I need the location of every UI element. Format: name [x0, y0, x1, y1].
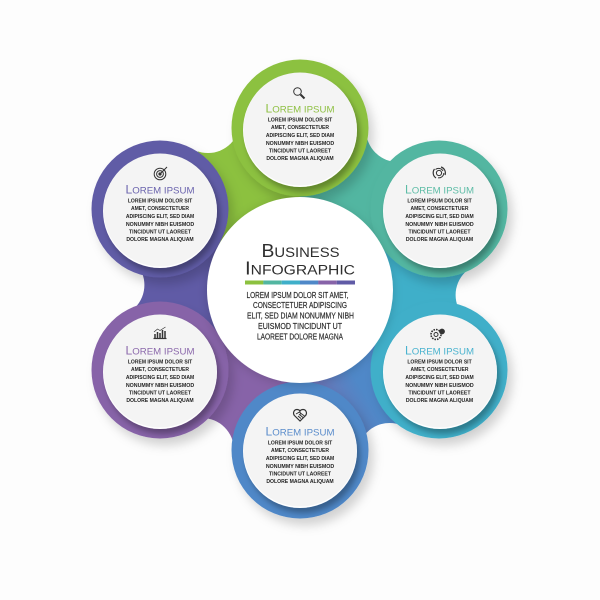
petal ring: purple [92, 302, 228, 438]
panel: green step text: ADIPISCING ELIT, SED DIAM [266, 133, 334, 139]
white discs [103, 72, 497, 508]
panel: cyan step text: NONUMMY NIBH EUISMOD [405, 383, 474, 389]
icon: gears [431, 329, 444, 340]
panel: teal step text: ADIPISCING ELIT, SED DIAM [405, 214, 474, 220]
center heading: INFOGRAPHIC [245, 258, 355, 278]
panel: blue step text: LOREM IPSUM DOLOR SIT [268, 440, 332, 446]
petal ring: cyan [370, 302, 508, 438]
panel: teal step text: DOLORE MAGNA ALIQUAM [406, 237, 473, 243]
center paragraph: CONSECTETUER ADIPISCING [253, 301, 347, 310]
panel: teal step text: AMET, CONSECTETUER [410, 206, 469, 212]
panel: blue step text: AMET, CONSECTETUER [271, 448, 330, 454]
panel: purple step text: AMET, CONSECTETUER [131, 367, 190, 373]
icon: handshake heart [294, 410, 306, 421]
panel: purple step text: DOLORE MAGNA ALIQUAM [126, 398, 194, 404]
panel: green step text: LOREM IPSUM [265, 102, 335, 116]
colour bar [245, 280, 355, 284]
notches between petals [80, 89, 520, 487]
panel: purple step text [126, 344, 194, 404]
panel: purple step text: ADIPISCING ELIT, SED DIAM [126, 375, 194, 381]
panel: teal step text: TINCIDUNT UT LAOREET [408, 229, 471, 235]
panel: green step text: TINCIDUNT UT LAOREET [269, 148, 331, 154]
petal ring: teal [370, 140, 508, 278]
icon: target [154, 167, 167, 180]
panel: cyan step text: LOREM IPSUM [405, 344, 474, 358]
connecting colour band [128, 118, 472, 462]
panel: blue step text: LOREM IPSUM [265, 425, 335, 439]
panel: purple step text: TINCIDUNT UT LAOREET [129, 391, 191, 397]
center heading: BUSINESS [262, 240, 340, 261]
center paragraph: EUISMOD TINCIDUNT UT [258, 322, 342, 331]
petal ring: blue [232, 382, 368, 518]
center heading [245, 240, 355, 278]
panel: cyan step text: AMET, CONSECTETUER [410, 367, 469, 373]
central circle [207, 197, 393, 383]
panel: teal step text: LOREM IPSUM DOLOR SIT [407, 198, 472, 204]
panel: indigo step text: NONUMMY NIBH EUISMOD [126, 222, 194, 228]
panel: purple step text: LOREM IPSUM DOLOR SIT [128, 359, 192, 365]
panel: blue step text: NONUMMY NIBH EUISMOD [266, 464, 334, 470]
panel: indigo step text [126, 183, 194, 243]
panel: blue step text: ADIPISCING ELIT, SED DIAM [266, 456, 334, 462]
panel: blue step text [266, 425, 334, 485]
petal ring: indigo [92, 140, 228, 278]
icon: clock target [433, 167, 445, 178]
petal ring: green [232, 60, 368, 196]
panel: cyan step text [405, 344, 474, 404]
panel: indigo step text: LOREM IPSUM DOLOR SIT [128, 198, 192, 204]
panel: teal step text [405, 183, 474, 243]
center paragraph: LOREM IPSUM DOLOR SIT AMET, [246, 291, 348, 300]
panel: cyan step text: TINCIDUNT UT LAOREET [408, 391, 471, 397]
panel: green step text: LOREM IPSUM DOLOR SIT [268, 117, 332, 123]
panel: indigo step text: ADIPISCING ELIT, SED DIAM [126, 214, 194, 220]
panel: green step text: DOLORE MAGNA ALIQUAM [266, 156, 334, 162]
icon: magnifier [294, 88, 304, 98]
panel: teal step text: LOREM IPSUM [405, 183, 474, 197]
panel: indigo step text: LOREM IPSUM [125, 183, 195, 197]
panel: blue step text: TINCIDUNT UT LAOREET [269, 472, 331, 478]
panel: purple step text: NONUMMY NIBH EUISMOD [126, 383, 194, 389]
center paragraph: ELIT, SED DIAM NONUMMY NIBH [247, 312, 354, 321]
panel: teal step text: NONUMMY NIBH EUISMOD [405, 222, 474, 228]
panel: green step text: AMET, CONSECTETUER [271, 125, 330, 131]
panel: indigo step text: AMET, CONSECTETUER [131, 206, 190, 212]
panel: green step text [266, 102, 334, 162]
panel: cyan step text: LOREM IPSUM DOLOR SIT [407, 359, 472, 365]
panel: indigo step text: TINCIDUNT UT LAOREET [129, 229, 191, 235]
panel: cyan step text: DOLORE MAGNA ALIQUAM [406, 398, 473, 404]
panel: indigo step text: DOLORE MAGNA ALIQUAM [126, 237, 194, 243]
icon: bar chart [154, 327, 166, 338]
panel: green step text: NONUMMY NIBH EUISMOD [266, 141, 334, 147]
panel: cyan step text: ADIPISCING ELIT, SED DIAM [405, 375, 474, 381]
panel: purple step text: LOREM IPSUM [125, 344, 195, 358]
center paragraph: LAOREET DOLORE MAGNA [257, 332, 344, 341]
panel: blue step text: DOLORE MAGNA ALIQUAM [266, 479, 334, 485]
center paragraph [246, 291, 354, 341]
